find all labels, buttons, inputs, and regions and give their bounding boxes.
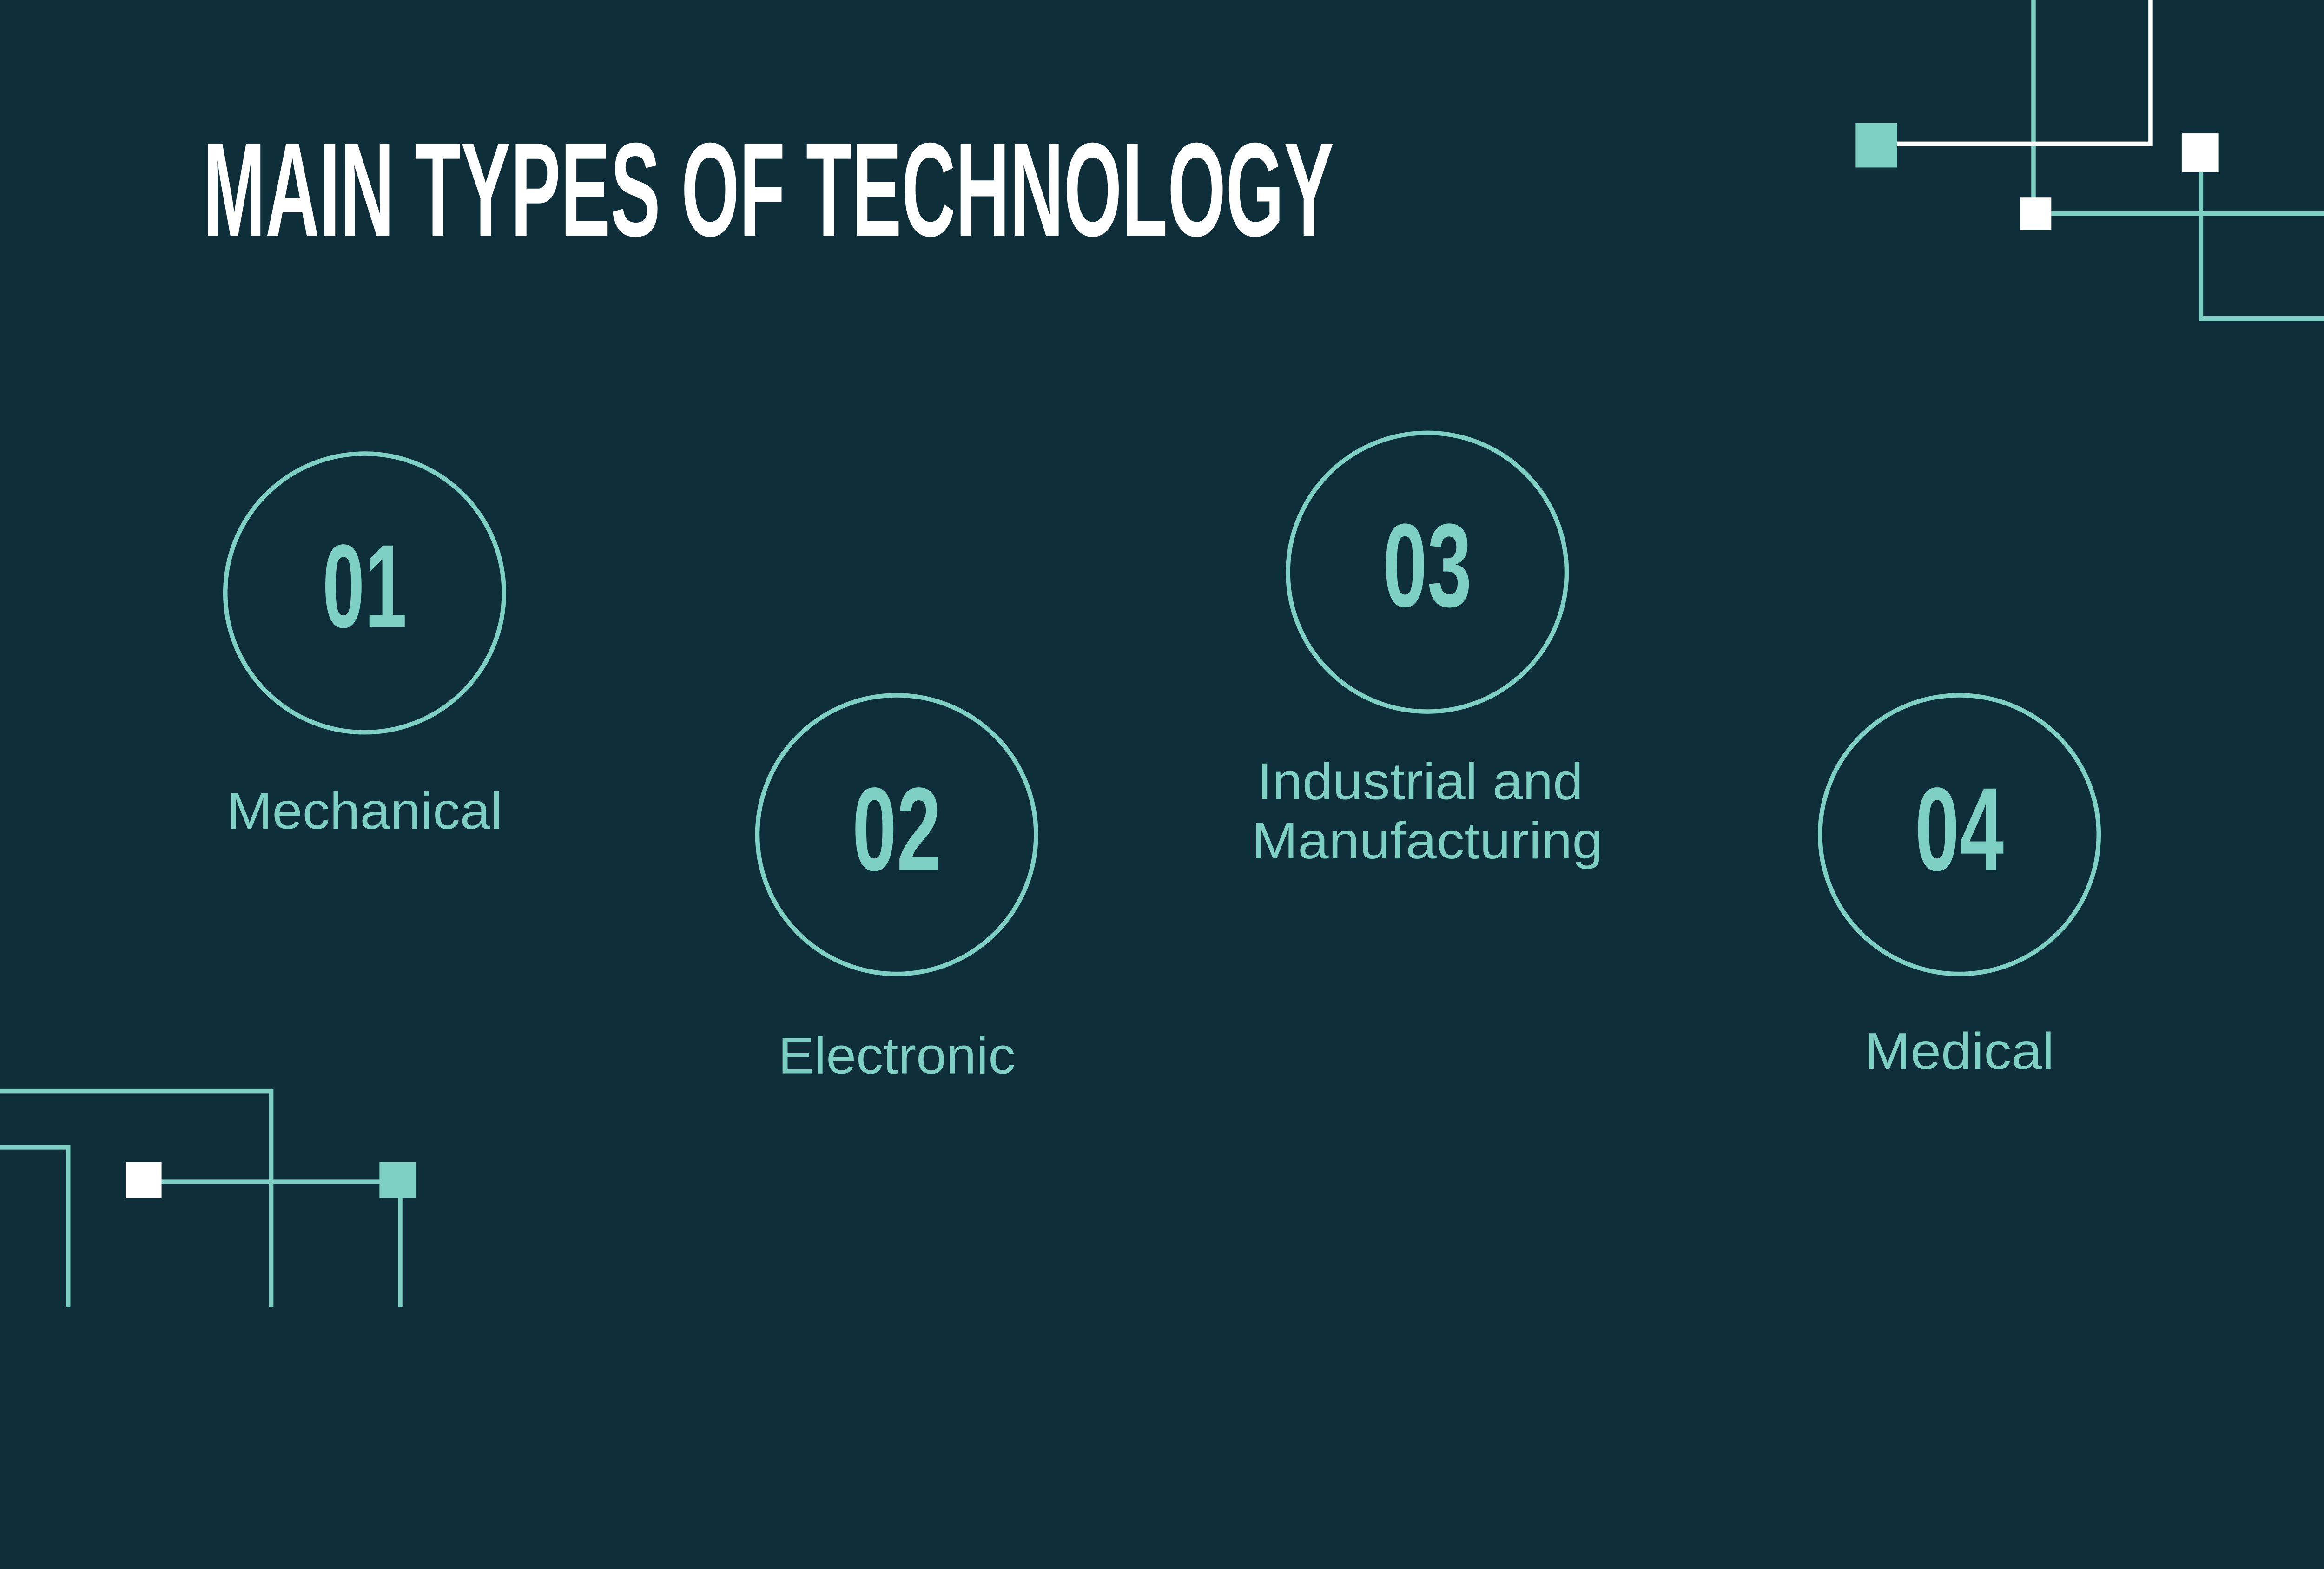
item 02: Electronic [757, 695, 1036, 1084]
label: Industrial and Manufacturing: Manufacturing [1252, 811, 1603, 870]
circle 02 [757, 695, 1036, 974]
circle 01 [225, 454, 504, 732]
label: Electronic: Electronic [778, 1026, 1015, 1084]
circle 04 [1820, 695, 2099, 974]
decoration: top-right circuit [1855, 0, 2324, 319]
decoration: bottom-left circuit [0, 1091, 416, 1307]
label: Industrial and Manufacturing: Industrial and [1257, 752, 1583, 810]
number 02: 02 [852, 763, 941, 896]
label: Medical: Medical [1864, 1022, 2054, 1080]
label: Mechanical: Mechanical [227, 782, 502, 840]
item 04: Medical [1820, 695, 2099, 1080]
number 01: 01 [323, 520, 407, 653]
number 03: 03 [1383, 500, 1472, 632]
circle 03 [1288, 433, 1567, 712]
item 03: Industrial and Manufacturing [1252, 433, 1603, 870]
item 01: Mechanical [225, 454, 504, 840]
title: MAIN TYPES OF TECHNOLOGY [203, 115, 1334, 264]
number 04: 04 [1915, 763, 2004, 896]
